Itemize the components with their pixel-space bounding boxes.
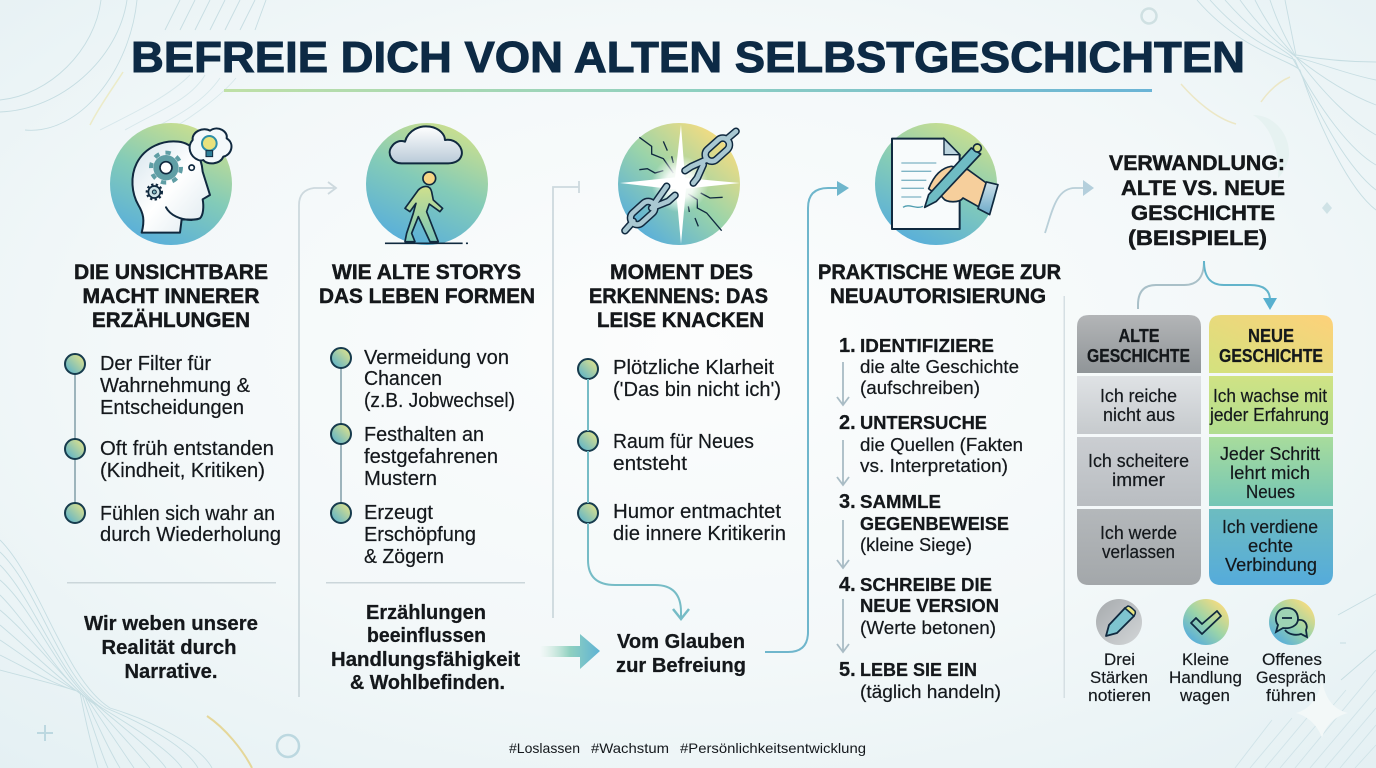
bullet list: die innere Kritikerin: [613, 523, 786, 545]
table: new story column: jeder Erfahrung: [1209, 404, 1329, 425]
action: dare a small step: wagen: [1179, 686, 1230, 705]
action: open conversation: [1256, 599, 1326, 705]
takeaway text: Wir weben unsere: [84, 612, 258, 635]
step 5: [839, 659, 1001, 702]
bullet list: Oft früh entstanden: [100, 438, 274, 460]
conclusion text: [616, 630, 746, 677]
table: new story column: Neues: [1246, 481, 1295, 502]
step 4: [837, 574, 999, 652]
heading: [1109, 152, 1285, 250]
bullet list: Chancen: [364, 368, 442, 390]
bullet list: [65, 353, 281, 546]
table: old story column: Ich scheitere: [1088, 450, 1189, 471]
heading: DIE UNSICHTBARE: [74, 261, 268, 284]
hashtags: #Wachstum: [591, 740, 669, 756]
action: open conversation: Offenes: [1262, 650, 1322, 669]
table: old story column: immer: [1112, 469, 1165, 490]
bullet list: durch Wiederholung: [100, 524, 281, 546]
step 4: 4.: [839, 574, 856, 596]
conclusion text: zur Befreiung: [616, 654, 746, 677]
panel: column 4 practical ways: [818, 123, 1061, 702]
bullet list: entsteht: [613, 453, 687, 475]
heading: ERZÄHLUNGEN: [92, 309, 250, 332]
table: old story column: Ich werde: [1100, 522, 1177, 543]
step 2: die Quellen (Fakten: [860, 434, 1023, 455]
icon: breaking chain with spark: [618, 123, 740, 245]
arrow: column 3 to column 4: [765, 181, 849, 652]
step 2: UNTERSUCHE: [860, 412, 987, 433]
action: open conversation: führen: [1266, 686, 1316, 705]
step 4: NEUE VERSION: [860, 595, 999, 616]
step 3: [837, 491, 1009, 568]
icon: pencil: [1096, 599, 1142, 645]
panel: column 3 moment of recognition: [540, 123, 786, 677]
step 4: SCHREIBE DIE: [860, 574, 992, 595]
panel: column 2 old stories: [319, 123, 535, 694]
step 4: (Werte betonen): [860, 617, 996, 638]
step 3: 3.: [839, 491, 856, 513]
table: new story column: NEUE: [1248, 325, 1294, 346]
takeaway text: beeinflussen: [367, 624, 486, 647]
icon: person walking under cloud: [366, 123, 488, 245]
arrow: column 1 to column 2: [299, 182, 336, 697]
icon: head with gears and light bulb: [110, 123, 232, 245]
hashtags: #Persönlichkeitsentwicklung: [680, 740, 866, 756]
heading: DAS LEBEN FORMEN: [319, 285, 535, 308]
icon: speech bubbles: [1269, 599, 1315, 645]
action: open conversation: Gespräch: [1256, 668, 1326, 687]
bullet list: [331, 347, 515, 568]
step 3: SAMMLE: [860, 491, 941, 512]
conclusion text: Vom Glauben: [617, 630, 745, 653]
arrow: column 2 to column 3: [553, 181, 579, 618]
heading: VERWANDLUNG:: [1109, 152, 1285, 175]
step 2: [837, 412, 1023, 485]
action: dare a small step: Handlung: [1169, 668, 1242, 687]
bullet list: ('Das bin nicht ich'): [613, 379, 781, 401]
bullet list: Wahrnehmung &: [100, 375, 251, 397]
takeaway text: Realität durch: [102, 636, 236, 659]
step 1: 1.: [839, 335, 856, 357]
action: note three strengths: Drei: [1104, 650, 1135, 669]
bullet list: Raum für Neues: [613, 431, 754, 453]
bullet list: [578, 357, 786, 545]
takeaway text: & Wohlbefinden.: [350, 671, 505, 694]
bullet list: Fühlen sich wahr an: [100, 503, 275, 525]
step 5: 5.: [839, 659, 856, 681]
bullet list: (z.B. Jobwechsel): [364, 390, 515, 412]
bullet list: festgefahrenen: [364, 446, 498, 468]
bullet list: Plötzliche Klarheit: [613, 357, 774, 379]
table: old story column: verlassen: [1102, 541, 1175, 562]
action: note three strengths: notieren: [1088, 686, 1151, 705]
step 1: die alte Geschichte: [860, 356, 1019, 377]
step 5: (täglich handeln): [860, 681, 1001, 702]
takeaway text: Narrative.: [124, 660, 218, 683]
heading: ERKENNENS: DAS: [589, 285, 768, 308]
heading: MOMENT DES: [610, 261, 753, 284]
hashtags: #Loslassen: [509, 740, 580, 756]
heading: LEISE KNACKEN: [597, 309, 764, 332]
heading: [589, 261, 768, 332]
arrow: big gradient arrow: [540, 634, 600, 669]
bullet list: Erschöpfung: [364, 524, 476, 546]
heading: NEUAUTORISIERUNG: [830, 285, 1046, 308]
table: new story column: Verbindung: [1225, 554, 1317, 575]
heading: [74, 261, 268, 332]
table: new story column: [1209, 315, 1333, 585]
table: new story column: echte: [1248, 535, 1293, 556]
arrow: list to conclusion: [588, 379, 689, 619]
icon: check mark: [1183, 599, 1229, 645]
bullet list: Festhalten an: [364, 424, 484, 446]
bullet list: Humor entmachtet: [613, 501, 781, 523]
icon: hand writing on document: [875, 123, 998, 245]
table: old story column: GESCHICHTE: [1087, 345, 1190, 366]
step 3: (kleine Siege): [860, 534, 972, 555]
takeaway text: Erzählungen: [366, 601, 486, 624]
heading: ALTE VS. NEUE: [1121, 177, 1285, 200]
hashtags: [509, 740, 866, 756]
step 2: 2.: [839, 412, 856, 434]
heading: (BEISPIELE): [1128, 227, 1267, 250]
arrow: branching brace: [1138, 261, 1277, 310]
bullet list: Entscheidungen: [100, 397, 244, 419]
step 5: LEBE SIE EIN: [860, 659, 977, 680]
bullet list: Mustern: [364, 468, 437, 490]
arrow: column 4 to column 5: [1045, 180, 1094, 233]
action: dare a small step: [1169, 599, 1242, 705]
step 2: vs. Interpretation): [860, 455, 1008, 476]
heading: GESCHICHTE: [1131, 202, 1275, 225]
step 3: GEGENBEWEISE: [860, 513, 1009, 534]
heading: WIE ALTE STORYS: [332, 261, 521, 284]
action: note three strengths: Stärken: [1090, 668, 1148, 687]
table: new story column: Jeder Schritt: [1220, 443, 1320, 464]
panel: column 1 inner narratives: [65, 123, 281, 683]
table: new story column: Ich wachse mit: [1213, 385, 1327, 406]
heading: MACHT INNERER: [82, 285, 260, 308]
step 1: [837, 335, 1019, 405]
action: dare a small step: Kleine: [1182, 650, 1229, 669]
table: new story column: GESCHICHTE: [1219, 345, 1323, 366]
heading: PRAKTISCHE WEGE ZUR: [818, 261, 1061, 284]
takeaway text: [84, 612, 258, 683]
bullet list: (Kindheit, Kritiken): [100, 460, 265, 482]
bullet list: Vermeidung von: [364, 347, 509, 369]
table: new story column: lehrt mich: [1230, 462, 1310, 483]
table: old story column: [1077, 315, 1201, 585]
heading: [818, 261, 1061, 308]
bullet list: Erzeugt: [364, 502, 433, 524]
table: old story column: nicht aus: [1103, 404, 1175, 425]
numbered steps: [837, 335, 1023, 702]
panel: column 5 old vs new story: [1077, 152, 1333, 705]
takeaway text: [331, 601, 520, 694]
takeaway text: Handlungsfähigkeit: [331, 648, 520, 671]
table: old story column: Ich reiche: [1100, 385, 1177, 406]
step 1: IDENTIFIZIERE: [860, 335, 994, 356]
heading: [319, 261, 535, 308]
bullet list: & Zögern: [364, 546, 444, 568]
title: BEFREIE DICH VON ALTEN SELBSTGESCHICHTEN: [131, 33, 1245, 82]
step 1: (aufschreiben): [860, 377, 980, 398]
table: old story column: ALTE: [1118, 325, 1160, 346]
table: new story column: Ich verdiene: [1222, 516, 1318, 537]
bullet list: Der Filter für: [100, 353, 211, 375]
action: note three strengths: [1088, 599, 1151, 705]
